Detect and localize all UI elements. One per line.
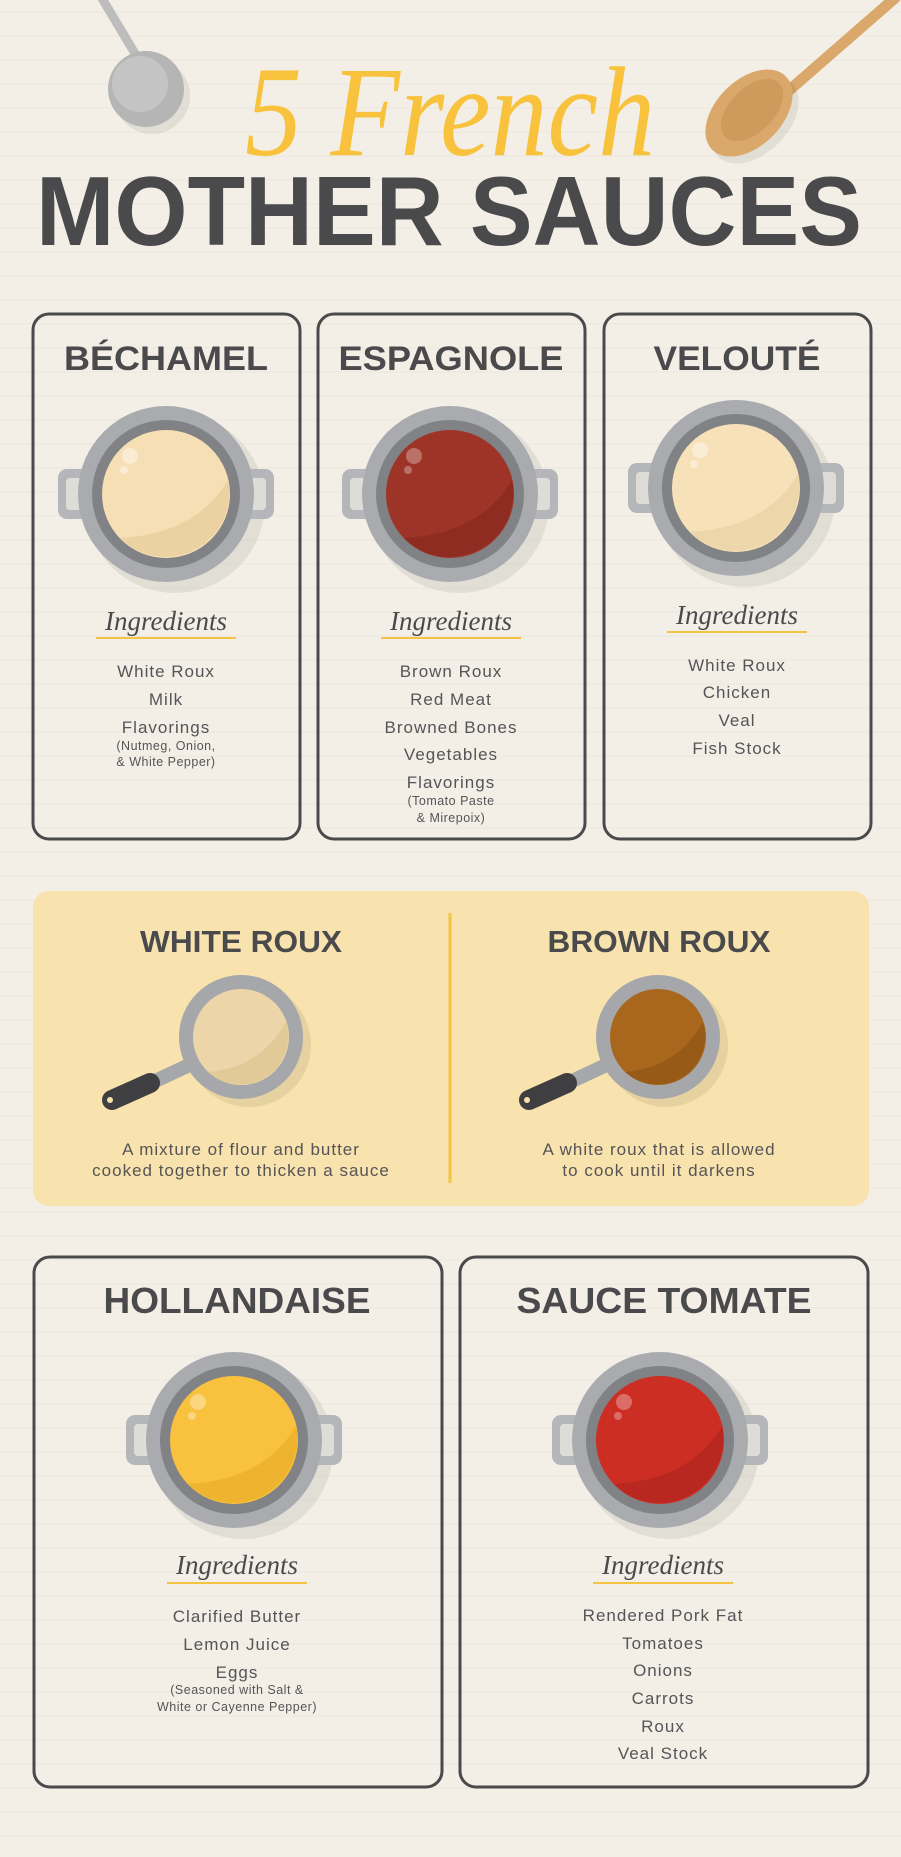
text: tomate ingredients: Onions [633, 1661, 693, 1680]
text: hollandaise ingredients: (Seasoned with Salt & [170, 1683, 304, 1697]
text: bechamel ingredients [116, 662, 216, 769]
text: white roux description: A mixture of flour and butter [122, 1140, 360, 1159]
heading: veloute: VELOUTÉ [654, 340, 820, 378]
icon: veloute pot [628, 400, 844, 587]
text: brown roux description: A white roux that is allowed [542, 1140, 776, 1159]
text: espagnole ingredients: & Mirepoix) [417, 811, 485, 825]
heading: brown roux: BROWN ROUX [548, 924, 771, 959]
label: ingredients: Ingredients [104, 606, 227, 636]
text: tomate ingredients [583, 1606, 743, 1763]
text: white roux description: cooked together to thicken a sauce [92, 1161, 390, 1180]
text: bechamel ingredients: Milk [149, 690, 183, 709]
text: espagnole ingredients: Flavorings [407, 773, 495, 792]
label: ingredients: Ingredients [175, 1550, 298, 1580]
text: white roux description [92, 1140, 390, 1180]
heading: white roux: WHITE ROUX [140, 924, 342, 959]
heading: bechamel: BÉCHAMEL [64, 340, 268, 378]
text: bechamel ingredients: (Nutmeg, Onion, [116, 739, 216, 753]
text: tomate ingredients: Roux [641, 1717, 685, 1736]
text: hollandaise ingredients: Lemon Juice [183, 1635, 291, 1654]
label: ingredients: Ingredients [675, 600, 798, 630]
heading: sauce tomate: SAUCE TOMATE [516, 1280, 812, 1321]
text: hollandaise ingredients: White or Cayenne Pepper) [157, 1700, 317, 1714]
icon: ladle [100, 0, 190, 134]
title: 5 French: 5 French [245, 41, 655, 183]
icon: hollandaise pot [126, 1352, 342, 1539]
text: tomate ingredients: Rendered Pork Fat [583, 1606, 743, 1625]
text: espagnole ingredients: Browned Bones [384, 718, 518, 737]
text: bechamel ingredients: White Roux [117, 662, 215, 681]
panel: roux [33, 891, 869, 1206]
text: espagnole ingredients: Red Meat [410, 690, 492, 709]
text: hollandaise ingredients [157, 1607, 317, 1714]
heading: hollandaise: HOLLANDAISE [104, 1280, 370, 1321]
text: tomate ingredients: Carrots [632, 1689, 694, 1708]
text: espagnole ingredients: Brown Roux [400, 662, 502, 681]
icon: tomate pot [552, 1352, 768, 1539]
label: ingredients: Ingredients [389, 606, 512, 636]
text: veloute ingredients [688, 656, 786, 758]
panel: bechamel [33, 314, 300, 839]
panel: veloute [604, 314, 871, 839]
heading: espagnole: ESPAGNOLE [338, 340, 564, 378]
text: espagnole ingredients: Vegetables [404, 745, 498, 764]
label: ingredients: Ingredients [601, 1550, 724, 1580]
text: brown roux description [542, 1140, 776, 1180]
text: espagnole ingredients [384, 662, 518, 825]
text: veloute ingredients: Fish Stock [692, 739, 782, 758]
text: espagnole ingredients: (Tomato Paste [407, 794, 495, 808]
text: brown roux description: to cook until it darkens [562, 1161, 756, 1180]
icon: bechamel pot [58, 406, 274, 593]
text: bechamel ingredients: & White Pepper) [116, 755, 216, 769]
icon: white roux pan [107, 975, 311, 1107]
text: bechamel ingredients: Flavorings [122, 718, 210, 737]
panel: sauce tomate [460, 1257, 868, 1787]
text: hollandaise ingredients: Clarified Butter [173, 1607, 301, 1626]
panel: espagnole [318, 314, 585, 839]
panel: hollandaise [34, 1257, 442, 1787]
text: tomate ingredients: Tomatoes [622, 1634, 704, 1653]
icon: espagnole pot [342, 406, 558, 593]
text: veloute ingredients: Chicken [703, 683, 771, 702]
text: tomate ingredients: Veal Stock [618, 1744, 708, 1763]
icon: wooden spoon [689, 0, 895, 180]
text: hollandaise ingredients: Eggs [216, 1663, 258, 1682]
icon: brown roux pan [524, 975, 728, 1107]
text: veloute ingredients: White Roux [688, 656, 786, 675]
text: veloute ingredients: Veal [718, 711, 756, 730]
title: MOTHER SAUCES: MOTHER SAUCES [36, 156, 862, 266]
